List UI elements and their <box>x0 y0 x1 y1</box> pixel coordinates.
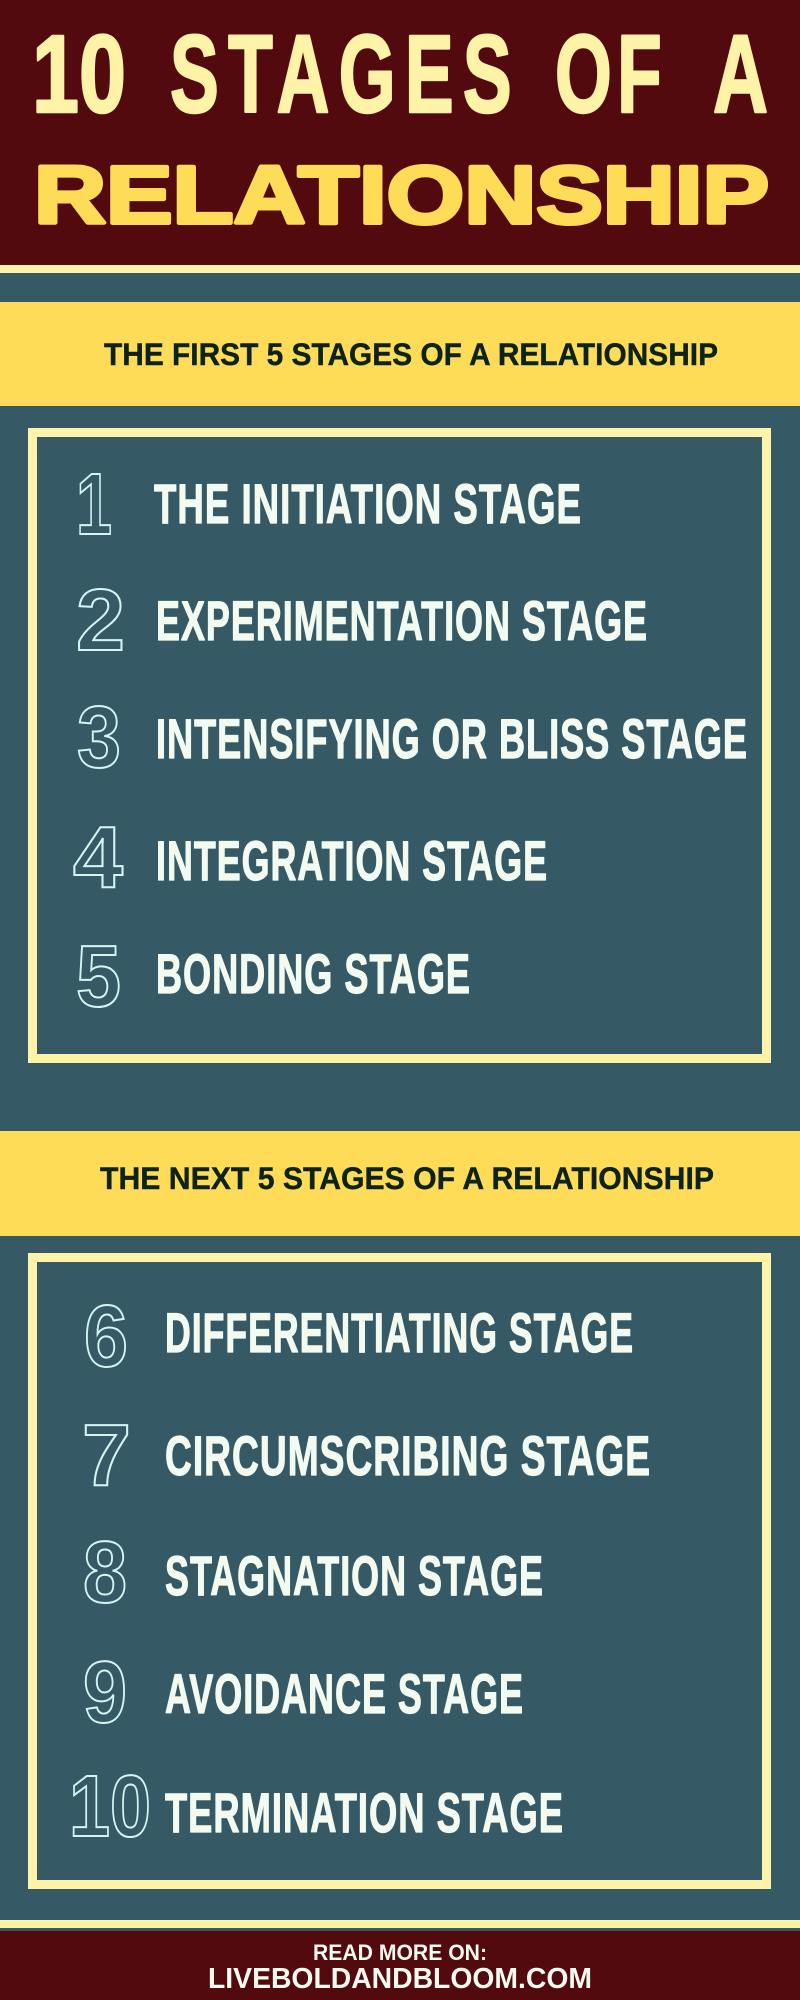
title <box>32 13 769 241</box>
stage 10 <box>69 1758 564 1855</box>
panel: next five heading <box>0 1131 800 1236</box>
title: RELATIONSHIP <box>34 150 769 241</box>
stage 1 <box>76 456 582 553</box>
stage 4: INTEGRATION STAGE <box>156 830 548 892</box>
stage 1: THE INITIATION STAGE <box>154 473 582 535</box>
stage 9: AVOIDANCE STAGE <box>165 1663 524 1725</box>
panel: first five heading <box>0 302 800 406</box>
stage 4 <box>73 809 548 906</box>
panel: next five heading: THE NEXT 5 STAGES OF A RELATIONSHIP <box>100 1160 714 1196</box>
panel: header <box>0 0 800 273</box>
stage 8: STAGNATION STAGE <box>165 1545 544 1607</box>
title: 10 <box>32 13 126 136</box>
stage 6 <box>84 1288 634 1385</box>
stage 6: 6 <box>84 1288 128 1385</box>
stage 4: 4 <box>73 809 123 906</box>
title: A <box>713 13 768 136</box>
panel: footer: LIVEBOLDANDBLOOM.COM <box>208 1963 592 1995</box>
panel: first five heading: THE FIRST 5 STAGES OF A RELATIONSHIP <box>104 336 718 372</box>
stage 9: 9 <box>83 1644 127 1741</box>
stage 7 <box>82 1407 651 1504</box>
stage 5: BONDING STAGE <box>156 943 471 1005</box>
stage 5: 5 <box>76 928 121 1025</box>
stage 2 <box>76 572 648 669</box>
title: STAGES <box>170 13 521 136</box>
stage 9 <box>83 1644 524 1741</box>
stage 1: 1 <box>76 456 112 553</box>
panel: next five stages <box>32 1258 766 1884</box>
stage 3: 3 <box>77 689 121 786</box>
stage 5 <box>76 928 471 1025</box>
panel: footer: READ MORE ON: <box>313 1940 487 1965</box>
title: OF <box>555 13 667 136</box>
stage 10: TERMINATION STAGE <box>165 1782 564 1844</box>
stage 2: 2 <box>76 572 125 669</box>
stage 3 <box>77 689 748 786</box>
stage 8: 8 <box>83 1524 127 1621</box>
stage 10: 10 <box>69 1758 151 1855</box>
panel: first five stages <box>32 432 766 1058</box>
panel: footer <box>0 1920 800 2000</box>
stage 7: 7 <box>82 1407 131 1504</box>
stage 8 <box>83 1524 544 1621</box>
